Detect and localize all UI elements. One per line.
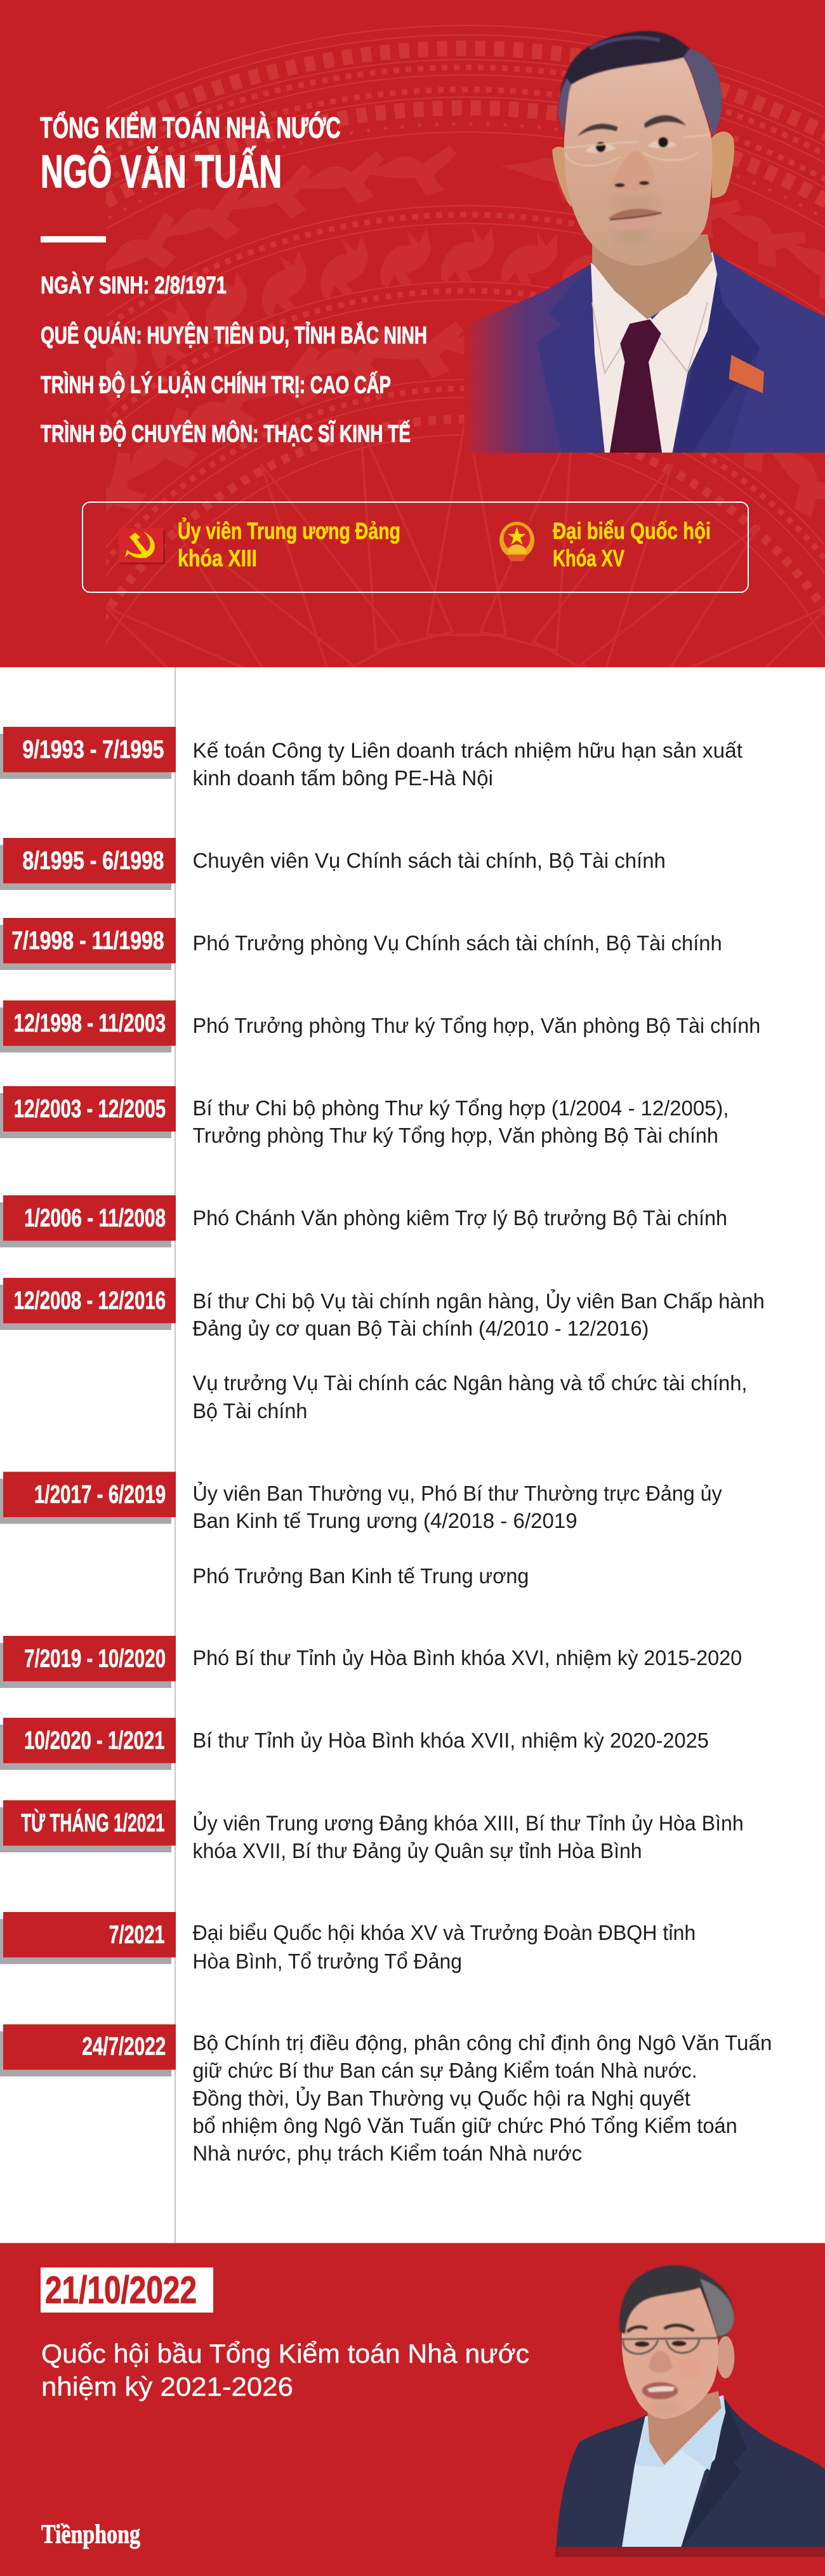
timeline entry 2: 8/1995 - 6/1998 — [23, 847, 164, 875]
timeline entry 13: Nhà nước, phụ trách Kiểm toán Nhà nước — [193, 2142, 582, 2165]
face — [716, 2336, 734, 2379]
timeline entry 1: Kế toán Công ty Liên doanh trách nhiệm hữu hạn sản xuất — [193, 739, 742, 762]
personal details: QUÊ QUÁN: HUYỆN TIÊN DU, TỈNH BẮC NINH — [41, 321, 427, 349]
timeline entry 5: Trưởng phòng Thư ký Tổng hợp, Văn phòng Bộ Tài chính — [193, 1124, 718, 1147]
timeline entry 10 — [0, 1718, 709, 1770]
membership text left — [178, 517, 400, 571]
timeline entry 8: 1/2017 - 6/2019 — [34, 1480, 166, 1508]
jacket — [557, 2400, 825, 2547]
timeline entry 2: Chuyên viên Vụ Chính sách tài chính, Bộ Tài chính — [193, 849, 666, 872]
timeline entry 3: 7/1998 - 11/1998 — [11, 927, 164, 955]
timeline entry 1: kinh doanh tấm bông PE-Hà Nội — [193, 766, 493, 790]
tie — [610, 319, 662, 453]
timeline entry 5 — [0, 1086, 729, 1147]
timeline axis — [175, 667, 176, 2243]
timeline entry 7 — [0, 1278, 765, 1423]
personal details: TRÌNH ĐỘ CHUYÊN MÔN: THẠC SĨ KINH TẾ — [41, 419, 411, 448]
timeline entry 12: Đại biểu Quốc hội khóa XV và Trưởng Đoàn ĐBQH tỉnh — [193, 1921, 696, 1944]
timeline entry 9: Phó Bí thư Tỉnh ủy Hòa Bình khóa XVI, nhiệm kỳ 2015-2020 — [193, 1646, 742, 1670]
timeline entry 13: giữ chức Bí thư Ban cán sự Đảng Kiểm toán Nhà nước. — [193, 2059, 697, 2082]
face shading — [609, 159, 660, 241]
personal details: TRÌNH ĐỘ LÝ LUẬN CHÍNH TRỊ: CAO CẤP — [41, 370, 391, 399]
portrait: footer photo — [557, 2266, 825, 2547]
timeline entry 4 — [0, 1000, 760, 1052]
face shading — [645, 2357, 703, 2414]
timeline entry 5: Bí thư Chi bộ phòng Thư ký Tổng hợp (1/2004 - 12/2005), — [193, 1096, 729, 1120]
date badge: 21/10/2022 — [45, 2269, 197, 2311]
timeline entry 12: Hòa Bình, Tổ trưởng Tổ Đảng — [193, 1949, 462, 1973]
head — [552, 31, 734, 265]
timeline entry 7: 12/2008 - 12/2016 — [14, 1287, 166, 1315]
footer statement — [41, 2339, 529, 2401]
timeline entry 8: Phó Trưởng Ban Kinh tế Trung ương — [193, 1564, 529, 1588]
shirt — [622, 2395, 725, 2547]
timeline entry 10: 10/2020 - 1/2021 — [24, 1727, 164, 1755]
timeline entry 5: 12/2003 - 12/2005 — [14, 1095, 166, 1123]
timeline entry 7: Bộ Tài chính — [193, 1399, 307, 1423]
icon: national emblem — [499, 522, 534, 561]
timeline entry 6: 1/2006 - 11/2008 — [24, 1204, 166, 1232]
facial features — [558, 31, 722, 230]
panel: hero header — [0, 0, 825, 667]
body — [464, 234, 825, 453]
hair and features — [619, 2266, 734, 2399]
timeline entry 13 — [0, 2024, 772, 2165]
timeline entry 11: TỪ THÁNG 1/2021 — [21, 1808, 165, 1837]
face — [564, 57, 712, 265]
lapel pin — [729, 355, 764, 393]
timeline entry 11: Ủy viên Trung ương Đảng khóa XIII, Bí thư Tỉnh ủy Hòa Bình — [193, 1812, 744, 1835]
timeline entry 8: Ban Kinh tế Trung ương (4/2018 - 6/2019 — [193, 1509, 578, 1532]
timeline entry 3: Phó Trưởng phòng Vụ Chính sách tài chính, Bộ Tài chính — [193, 931, 722, 955]
timeline entry 11 — [0, 1800, 744, 1862]
timeline entry 7: Bí thư Chi bộ Vụ tài chính ngân hàng, Ủy viên Ban Chấp hành — [193, 1289, 765, 1313]
timeline entry 10: Bí thư Tỉnh ủy Hòa Bình khóa XVII, nhiệm kỳ 2020-2025 — [193, 1729, 709, 1752]
timeline entry 13: Đồng thời, Ủy Ban Thường vụ Quốc hội ra Nghị quyết — [193, 2087, 690, 2110]
timeline entry 6 — [0, 1195, 727, 1247]
timeline entry 7: Đảng ủy cơ quan Bộ Tài chính (4/2010 - 12/2016) — [193, 1317, 649, 1340]
portrait: main photo — [464, 31, 825, 453]
timeline entry 12 — [0, 1912, 696, 1973]
timeline entry 1: 9/1993 - 7/1995 — [23, 736, 164, 764]
neck and shirt — [591, 251, 717, 453]
timeline entry 13: Bộ Chính trị điều động, phân công chỉ định ông Ngô Văn Tuấn — [193, 2031, 772, 2054]
personal details — [41, 271, 427, 448]
membership text right: Khóa XV — [553, 545, 624, 571]
membership text left: khóa XIII — [178, 545, 257, 571]
name: NGÔ VĂN TUẤN — [41, 146, 282, 197]
timeline entry 4: Phó Trưởng phòng Thư ký Tổng hợp, Văn phòng Bộ Tài chính — [193, 1014, 760, 1037]
divider bar — [41, 236, 106, 242]
timeline entry 4: 12/1998 - 11/2003 — [14, 1009, 166, 1037]
timeline entry 12: 7/2021 — [109, 1921, 165, 1949]
personal details: NGÀY SINH: 2/8/1971 — [41, 271, 227, 299]
timeline entry 13: bổ nhiệm ông Ngô Văn Tuấn giữ chức Phó Tổng Kiểm toán — [193, 2114, 737, 2137]
title — [40, 111, 341, 197]
timeline entry 8: Ủy viên Ban Thường vụ, Phó Bí thư Thường trực Đảng ủy — [193, 1482, 722, 1505]
background: bronze drum pattern — [106, 25, 825, 667]
timeline entry 9 — [0, 1636, 742, 1688]
suit — [464, 251, 825, 453]
timeline entry 2 — [0, 838, 666, 890]
timeline entry 8 — [0, 1471, 722, 1588]
membership text left: Ủy viên Trung ương Đảng — [178, 517, 400, 544]
timeline entry 1 — [0, 727, 742, 790]
panel: footer — [0, 2243, 825, 2576]
dark base bar — [555, 2547, 825, 2557]
icon: hammer and sickle — [119, 528, 165, 564]
timeline entry 11: khóa XVII, Bí thư Đảng ủy Quân sự tỉnh Hòa Bình — [193, 1839, 642, 1862]
panel: membership box — [82, 502, 748, 592]
timeline entry 9: 7/2019 - 10/2020 — [24, 1645, 166, 1673]
ears — [552, 131, 734, 208]
timeline entry 3 — [0, 918, 722, 970]
timeline entry 7: Vụ trưởng Vụ Tài chính các Ngân hàng và tổ chức tài chính, — [193, 1371, 748, 1395]
footer statement: Quốc hội bầu Tổng Kiểm toán Nhà nước — [41, 2339, 529, 2368]
footer statement: nhiệm kỳ 2021-2026 — [41, 2372, 293, 2401]
logo: Tiền Phong: Tiềnphong — [41, 2520, 140, 2549]
timeline entry 13: 24/7/2022 — [82, 2033, 166, 2061]
timeline entry 6: Phó Chánh Văn phòng kiêm Trợ lý Bộ trưởng Bộ Tài chính — [193, 1206, 727, 1230]
collar — [592, 302, 708, 373]
membership text right: Đại biểu Quốc hội — [553, 518, 711, 544]
membership text right — [553, 518, 711, 571]
title: TỔNG KIỂM TOÁN NHÀ NƯỚC — [40, 111, 341, 144]
